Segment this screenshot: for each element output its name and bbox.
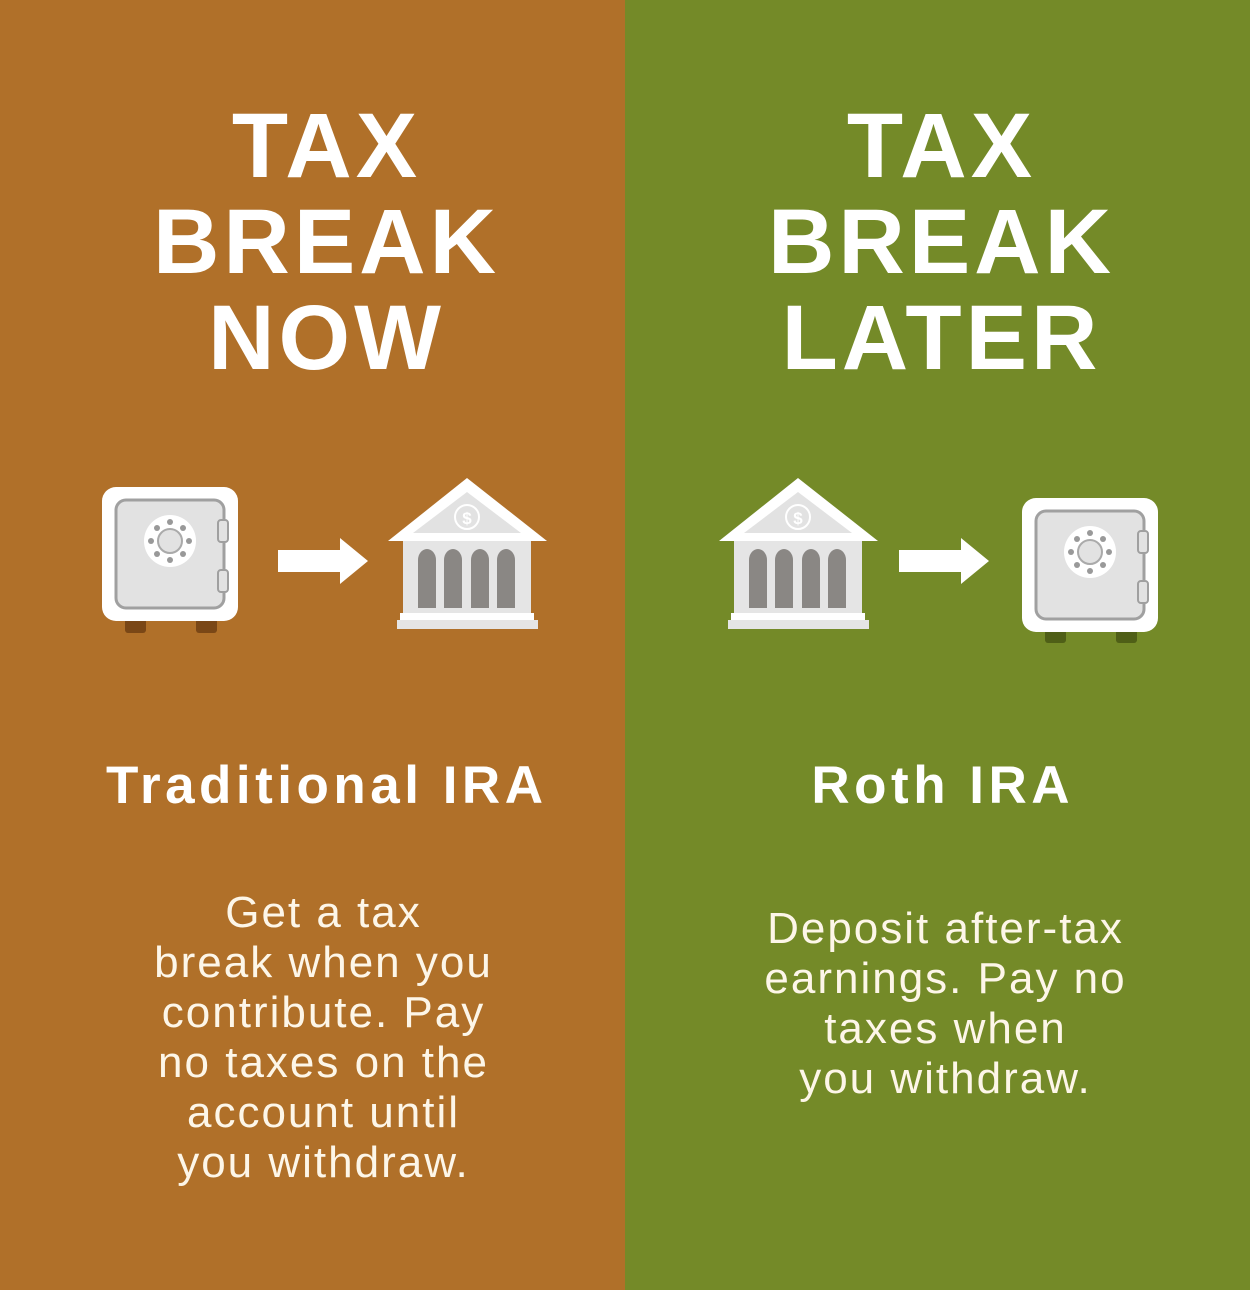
icon: bank: $ xyxy=(462,509,472,528)
body text: traditional: contribute. Pay xyxy=(162,988,485,1037)
title: tax break now: NOW xyxy=(208,287,445,389)
icon: bank xyxy=(719,478,878,629)
body text: traditional: no taxes on the xyxy=(158,1038,489,1087)
icon: bank xyxy=(388,478,547,629)
body text: traditional: break when you xyxy=(154,938,493,987)
title: tax break later: TAX xyxy=(847,95,1036,197)
body text: traditional xyxy=(154,888,493,1187)
icons: bank to safe xyxy=(719,478,1158,643)
panel: roth IRA xyxy=(625,0,1250,1290)
body text: traditional: Get a tax xyxy=(225,888,422,937)
arrow xyxy=(899,538,989,584)
icon: safe xyxy=(1022,498,1158,643)
body text: roth: earnings. Pay no xyxy=(764,954,1127,1003)
icon: bank: $ xyxy=(793,509,803,528)
icons: safe to bank xyxy=(102,478,547,633)
subheading: traditional IRA: Traditional IRA xyxy=(106,756,547,815)
body text: roth: you withdraw. xyxy=(799,1054,1092,1103)
arrow xyxy=(278,538,368,584)
title: tax break later: LATER xyxy=(782,287,1101,389)
title: tax break now xyxy=(153,95,500,389)
panel: traditional IRA xyxy=(0,0,625,1290)
title: tax break now: BREAK xyxy=(153,191,500,293)
body text: roth: Deposit after-tax xyxy=(767,904,1124,953)
title: tax break later xyxy=(768,95,1115,389)
subheading: roth IRA: Roth IRA xyxy=(811,756,1074,815)
icon: safe xyxy=(102,487,238,633)
body text: roth xyxy=(764,904,1127,1103)
title: tax break now: TAX xyxy=(232,95,421,197)
title: tax break later: BREAK xyxy=(768,191,1115,293)
body text: roth: taxes when xyxy=(824,1004,1067,1053)
body text: traditional: you withdraw. xyxy=(177,1138,470,1187)
body text: traditional: account until xyxy=(187,1088,460,1137)
